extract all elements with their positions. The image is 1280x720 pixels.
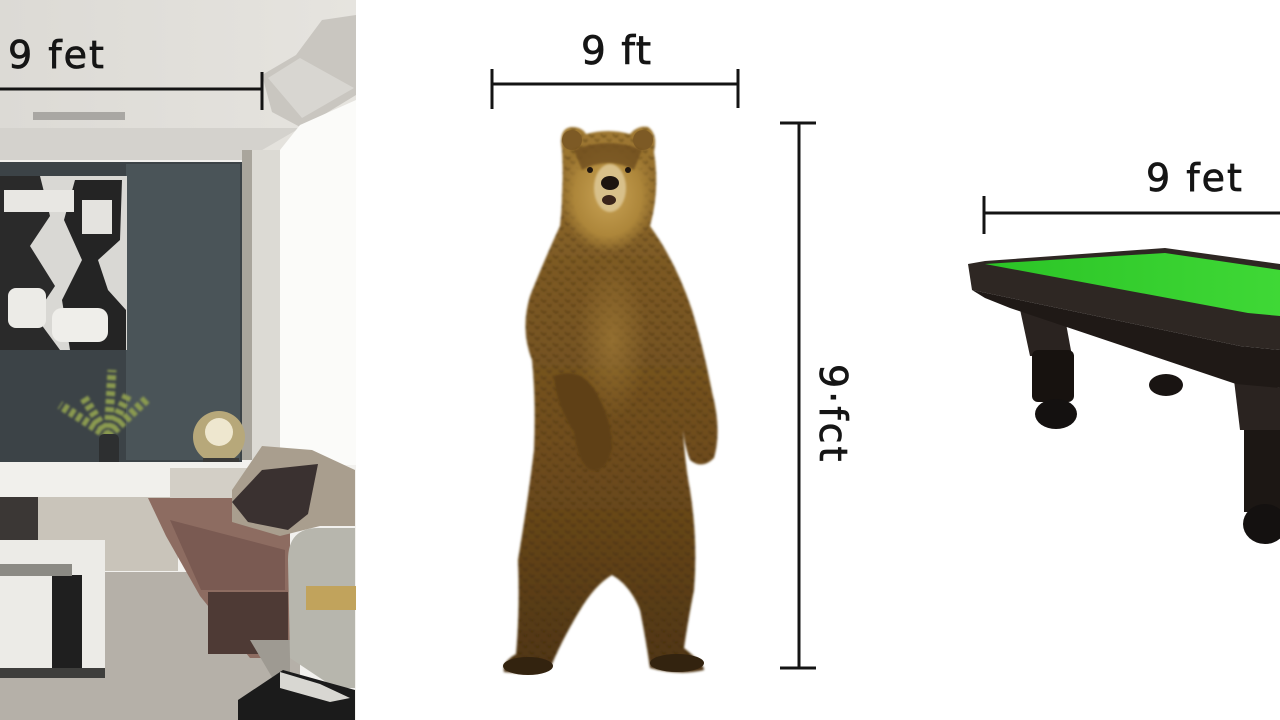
table legs xyxy=(1018,300,1280,544)
table apron xyxy=(972,290,1280,388)
table rail xyxy=(968,248,1280,350)
illustration: pool table xyxy=(968,248,1280,544)
floor rug xyxy=(0,572,300,720)
panel: living room photo xyxy=(0,0,356,720)
sofa xyxy=(38,446,355,688)
dimension: pool table width: 9 fet xyxy=(1146,156,1244,200)
bear lighter face and neck xyxy=(560,137,656,253)
table top felt xyxy=(985,253,1280,316)
console shelf xyxy=(0,462,240,497)
bear muzzle xyxy=(594,164,626,212)
plant in vase xyxy=(60,370,148,468)
bear left foreleg xyxy=(554,373,612,471)
illustration: standing brown bear xyxy=(503,127,718,675)
bear feet xyxy=(503,657,553,675)
left width label: 9 fet xyxy=(8,33,106,77)
dimension: bear height: 9·fct xyxy=(811,364,855,464)
dark feature wall xyxy=(0,162,242,462)
wall artwork xyxy=(0,176,127,350)
check cushion xyxy=(0,497,38,540)
ceiling xyxy=(0,0,356,160)
bear body xyxy=(504,127,718,673)
side table objects xyxy=(238,586,356,720)
dimension: bear width: 9 ft xyxy=(581,29,653,74)
coffee table xyxy=(0,540,105,678)
wall column and window xyxy=(242,100,356,465)
bear dark brow and cheek shading xyxy=(574,143,642,170)
bear ears xyxy=(562,130,582,150)
decorative sphere xyxy=(193,411,245,466)
